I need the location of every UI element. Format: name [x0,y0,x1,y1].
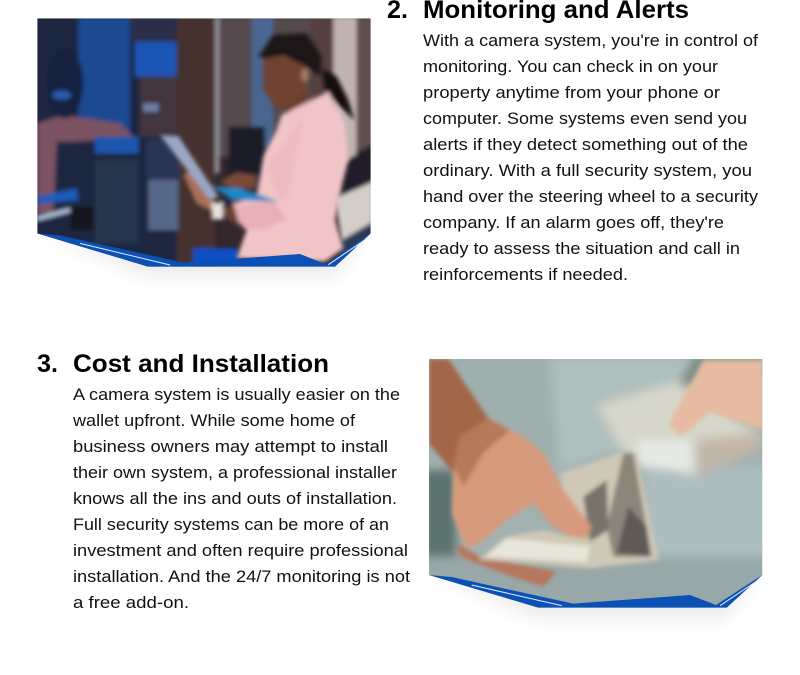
far bills [597,382,762,475]
near bills [478,452,658,568]
blue ribbon [37,233,371,267]
text block: monitoring body: computer. Some systems even send you [423,109,747,128]
text block: monitoring body: reinforcements if needed. [423,265,628,284]
text block: monitoring body: ordinary. With a full security system, you [423,161,752,180]
heading: Cost and Installation: 3. [37,350,58,378]
text block: monitoring body: alerts if they detect something out of the [423,135,748,154]
text block: cost body: installation. And the 24/7 monitoring is not [73,567,410,586]
text block: cost body: investment and often require professional [73,541,408,560]
laptop screen and base [160,135,218,200]
hand [452,418,592,548]
text block: monitoring body: With a camera system, you're in control of [423,31,758,50]
text block: cost body [72,385,410,612]
text block: cost body: Full security systems can be more of an [73,515,389,534]
text block: cost body: business owners may attempt to install [73,437,388,456]
text block: cost body: A camera system is usually easier on the [73,385,400,404]
arm [429,359,488,473]
text block: monitoring body: hand over the steering wheel to a security [423,187,759,206]
text block: monitoring body: property anytime from your phone or [423,83,720,102]
blue ribbon [429,575,762,608]
text block: cost body: their own system, a professional installer [73,463,397,482]
text block: cost body: a free add-on. [73,593,189,612]
text block: monitoring body: company. If an alarm goes off, they're [423,213,724,232]
text block: cost body: knows all the ins and outs of installation. [73,489,397,508]
text block: cost body: wallet upfront. While some home of [72,411,355,430]
photo: hands holding dollar bills [423,353,770,618]
text block: monitoring body: ready to assess the situation and call in [423,239,740,258]
heading: Cost and Installation: Cost and Installation [73,350,329,378]
neck and face [283,87,313,113]
ponytail [322,68,354,120]
hands and arm [220,172,257,188]
photo: woman with laptop in server room [33,13,377,277]
shirt [231,92,348,262]
text block: monitoring body: monitoring. You can check in on your [423,57,718,76]
lower fingers [457,543,557,587]
text block: monitoring body [423,31,759,284]
